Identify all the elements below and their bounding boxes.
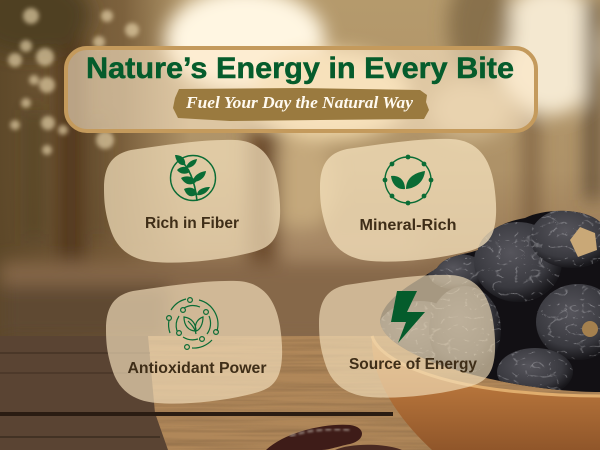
card: rich in fiber bbox=[104, 140, 280, 263]
icon: leaves in dotted circle bbox=[383, 155, 433, 205]
wooden bowl bbox=[372, 336, 600, 450]
title plate bbox=[66, 48, 536, 131]
label: Antioxidant Power bbox=[128, 360, 266, 377]
dark dates bbox=[380, 210, 600, 392]
title: Nature’s Energy in Every Bite bbox=[86, 52, 514, 85]
wooden table bbox=[0, 336, 600, 450]
card: mineral-rich bbox=[320, 139, 496, 262]
icon: sprout with circuit rings bbox=[167, 298, 218, 349]
label: Source of Energy bbox=[349, 356, 477, 373]
bowl of dates bbox=[370, 200, 600, 450]
header panel bbox=[66, 48, 536, 131]
subtitle ribbon bbox=[173, 88, 429, 121]
background: blurred date palm forest bbox=[0, 0, 600, 340]
icon: lightning bolt bbox=[391, 291, 425, 343]
label: Rich in Fiber bbox=[145, 215, 239, 232]
date stems bbox=[570, 227, 597, 257]
small dates on table bbox=[266, 425, 402, 450]
subtitle: Fuel Your Day the Natural Way bbox=[185, 93, 413, 112]
card: source of energy bbox=[319, 275, 495, 398]
icon: leafy stem in circle bbox=[170, 155, 216, 201]
card: antioxidant power bbox=[106, 281, 282, 404]
label: Mineral-Rich bbox=[360, 217, 456, 234]
